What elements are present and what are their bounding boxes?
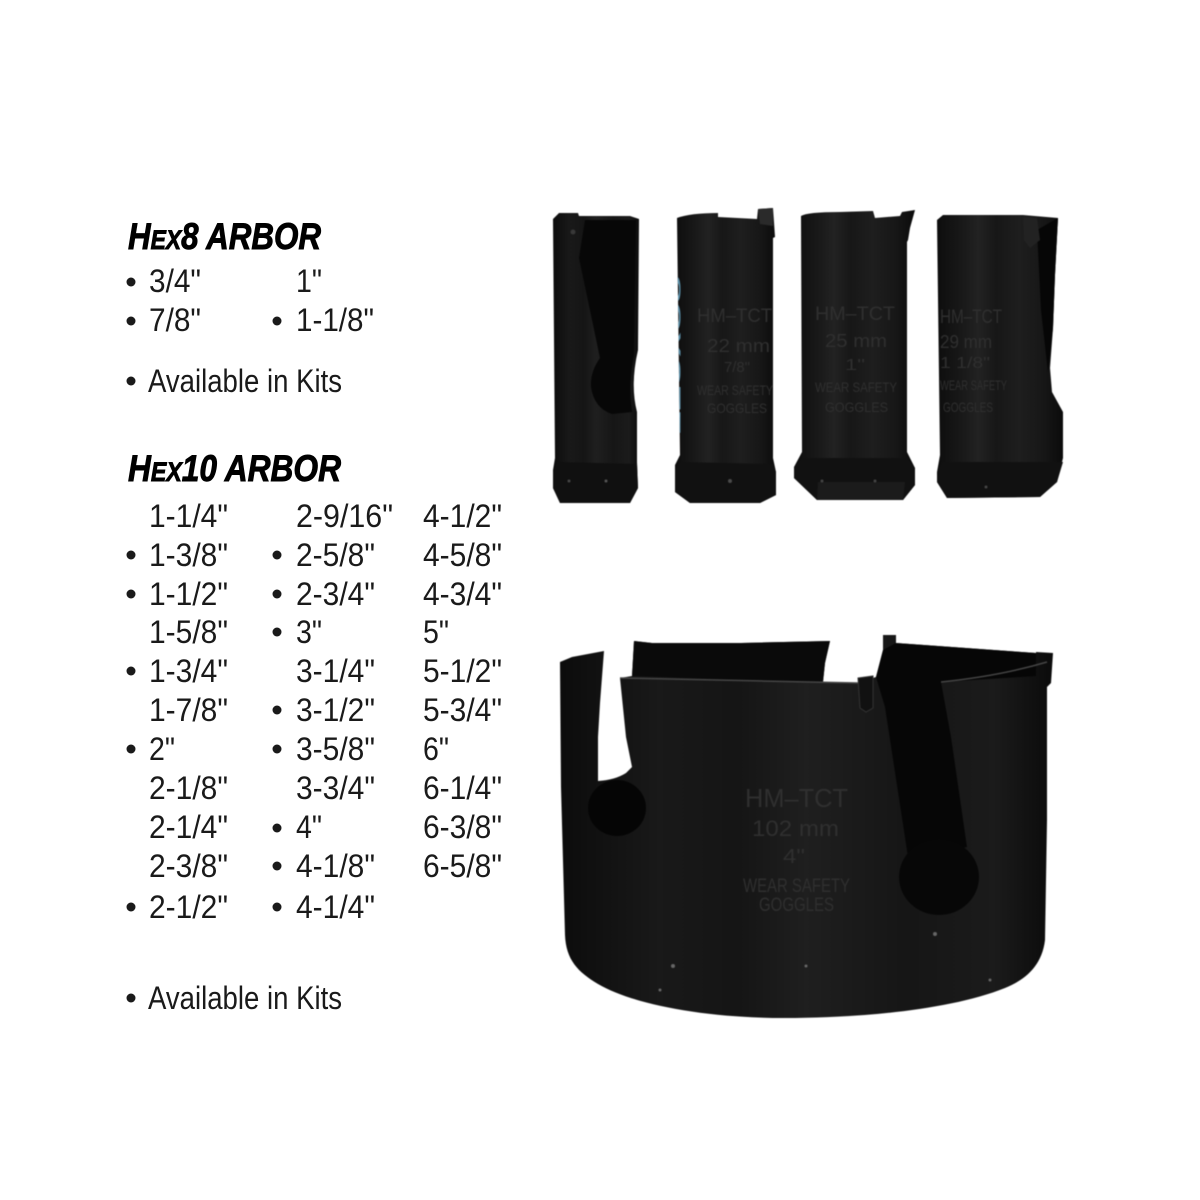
list: Hex10 sizes column 2: 3-5/8" <box>296 731 375 767</box>
list: Hex10 sizes column 3: 6-1/4" <box>423 770 502 806</box>
list: Hex10 sizes column 2: 2-5/8" <box>296 537 375 573</box>
panel: size lists <box>126 216 502 1016</box>
list: Hex10 sizes column 2: 3-1/2" <box>296 692 375 728</box>
right slot and gullet hole <box>876 643 1036 915</box>
list: Hex10 sizes column 1: 1-1/2" <box>149 576 228 612</box>
list: Hex10 sizes column 2 <box>272 498 393 925</box>
list: Hex10 sizes column 3: 6-3/8" <box>423 809 502 845</box>
list: Hex10 sizes column 1: 2-1/2" <box>149 889 228 925</box>
embossed marking on large bit: GOGGLES <box>759 895 834 916</box>
list: Hex10 sizes column 1: 1-1/4" <box>149 498 228 534</box>
list: Hex10 sizes column 3: 5-3/4" <box>423 692 502 728</box>
heading: Hex8 arbor: HEX8 ARBOR <box>128 216 321 257</box>
list: Hex10 sizes column 2: 4-1/8" <box>296 848 375 884</box>
note: Hex10 available in kits: Available in Kits <box>148 980 342 1016</box>
note: Hex8 available in kits: Available in Kits <box>148 363 342 399</box>
embossed marking on large bit: 102 mm <box>752 816 839 841</box>
back wall of the saw <box>632 641 830 682</box>
list: Hex10 sizes column 1: 1-7/8" <box>149 692 228 728</box>
list: Hex10 sizes column 3: 6-5/8" <box>423 848 502 884</box>
image: hole saw bit 3 <box>794 210 915 500</box>
list: Hex10 sizes column 2: 4-1/4" <box>296 889 375 925</box>
embossed marking on bit 2: HM–TCT <box>697 306 772 327</box>
embossed marking on bit 3 <box>815 304 898 415</box>
list: Hex10 sizes column 1: 1-3/4" <box>149 653 228 689</box>
embossed marking on bit 4: 29 mm <box>940 332 992 352</box>
list: Hex8 sizes: 7/8" <box>149 302 201 338</box>
list: Hex8 sizes: 3/4" <box>149 263 201 299</box>
image: hole saw bit 1 <box>553 213 639 503</box>
small tooth on rim <box>858 676 873 712</box>
heading: Hex10 arbor: HEX10 ARBOR <box>128 448 341 489</box>
list: Hex10 sizes column 3: 5-1/2" <box>423 653 502 689</box>
embossed marking on bit 3: GOGGLES <box>825 399 888 415</box>
image: hole saw bit 2 <box>669 208 776 503</box>
list: Hex10 sizes column 2: 2-3/4" <box>296 576 375 612</box>
rim highlight <box>620 662 1047 683</box>
list: Hex10 sizes column 2: 3-1/4" <box>296 653 375 689</box>
list: Hex10 sizes column 2: 3-3/4" <box>296 770 375 806</box>
wear specks <box>658 932 992 992</box>
embossed marking on bit 4: 1 1/8" <box>940 355 990 372</box>
embossed marking on bit 3: 25 mm <box>825 331 887 351</box>
embossed marking on bit 4: WEAR SAFETY <box>940 377 1007 393</box>
embossed marking on bit 3: 1" <box>845 357 865 374</box>
left gullet hole <box>588 780 646 836</box>
list: Hex10 sizes column 1 <box>126 498 228 925</box>
list: Hex10 sizes column 1: 2-1/8" <box>149 770 228 806</box>
embossed marking on bit 2 <box>697 306 773 416</box>
list: Hex10 sizes column 1: 2" <box>149 731 175 767</box>
embossed marking on bit 3: WEAR SAFETY <box>815 379 898 395</box>
embossed marking on large bit: HM–TCT <box>745 783 848 813</box>
list: Hex10 sizes column 2: 3" <box>296 614 322 650</box>
image: hole saw bit 4 <box>937 215 1063 498</box>
embossed marking on bit 2: 7/8" <box>724 359 750 376</box>
list: Hex8 sizes: 1-1/8" <box>296 302 374 338</box>
list: Hex10 sizes column 3: 4-3/4" <box>423 576 502 612</box>
embossed marking on bit 4: GOGGLES <box>943 399 993 415</box>
list: Hex10 sizes column 1: 1-3/8" <box>149 537 228 573</box>
embossed marking on bit 3: HM–TCT <box>815 304 895 325</box>
list: Hex8 sizes: 1" <box>296 263 322 299</box>
list: Hex10 sizes column 3: 4-1/2" <box>423 498 502 534</box>
embossed marking on large bit <box>743 783 850 916</box>
list: Hex10 sizes column 1: 1-5/8" <box>149 614 228 650</box>
list: Hex10 sizes column 1: 2-1/4" <box>149 809 228 845</box>
list: Hex10 sizes column 3: 6" <box>423 731 449 767</box>
list: Hex10 sizes column 3 <box>423 498 502 884</box>
list: Hex10 sizes column 2: 2-9/16" <box>296 498 393 534</box>
embossed marking on bit 2: GOGGLES <box>707 400 767 416</box>
embossed marking on large bit: 4" <box>783 846 805 868</box>
list: Hex10 sizes column 2: 4" <box>296 809 322 845</box>
embossed marking on large bit: WEAR SAFETY <box>743 876 850 897</box>
list: Hex10 sizes column 3: 4-5/8" <box>423 537 502 573</box>
embossed marking on bit 2: 22 mm <box>707 336 770 356</box>
label: blue print on bit 2: COYOTE <box>669 275 683 435</box>
image: large hole saw bit <box>560 635 1053 1018</box>
embossed marking on bit 4: HM–TCT <box>940 307 1002 328</box>
list: Hex10 sizes column 3: 5" <box>423 614 449 650</box>
embossed marking on bit 4 <box>940 307 1007 415</box>
embossed marking on bit 2: WEAR SAFETY <box>697 382 773 398</box>
list: Hex8 sizes <box>126 263 374 338</box>
list: Hex10 sizes column 1: 2-3/8" <box>149 848 228 884</box>
